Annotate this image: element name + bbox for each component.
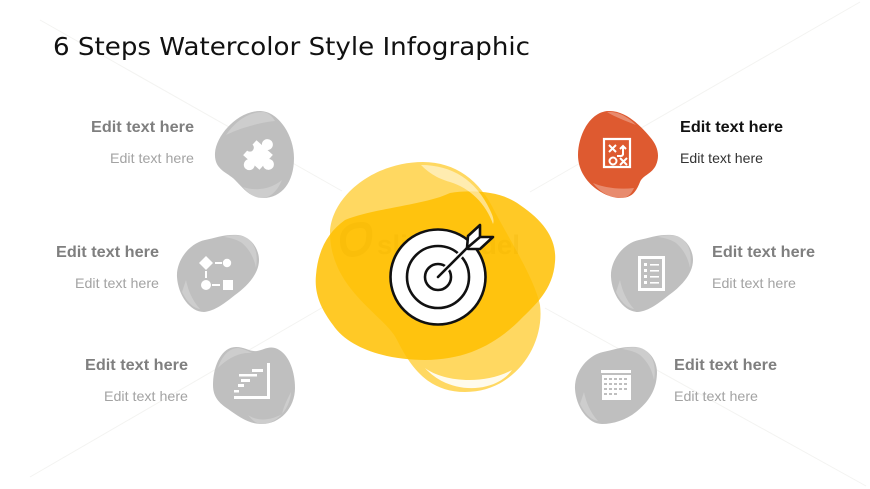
text: Edit text here xyxy=(75,275,159,291)
icon: puzzle piece xyxy=(234,130,286,182)
highlight xyxy=(182,235,257,309)
watermark: slideModel xyxy=(377,230,520,260)
text: Edit text here xyxy=(680,119,783,136)
icon: calendar xyxy=(601,370,631,400)
watermark xyxy=(340,222,520,260)
step 6: calendar xyxy=(575,347,777,424)
highlight xyxy=(580,347,655,421)
step 1: puzzle xyxy=(91,111,294,198)
text: Edit text here xyxy=(712,275,796,291)
highlight: top gloss xyxy=(421,165,494,224)
text: Edit text here xyxy=(712,244,815,261)
blob xyxy=(215,111,294,198)
icon: gantt chart xyxy=(234,363,270,399)
step 3: stair chart xyxy=(85,347,295,424)
text: Edit text here xyxy=(56,244,159,261)
text: Edit text here xyxy=(91,119,194,136)
blob xyxy=(578,111,658,198)
highlight xyxy=(218,348,291,424)
blob xyxy=(213,347,295,424)
icon: target with arrow xyxy=(390,225,493,324)
step 5: checklist xyxy=(611,235,815,312)
step 2: flowchart xyxy=(56,235,259,312)
central watercolor blob with target xyxy=(316,162,555,392)
highlight xyxy=(616,235,691,309)
highlight xyxy=(593,112,636,198)
title: 6 Steps Watercolor Style Infographic xyxy=(53,32,530,61)
blob: right yellow wash xyxy=(316,191,555,360)
highlight xyxy=(226,112,282,198)
icon: strategy board xyxy=(604,139,630,167)
text xyxy=(680,119,783,166)
text xyxy=(56,244,159,291)
highlight: bottom gloss xyxy=(425,368,512,388)
text xyxy=(712,244,815,291)
text: Edit text here xyxy=(110,150,194,166)
text: Edit text here xyxy=(674,357,777,374)
text: Edit text here xyxy=(680,150,763,166)
text: Edit text here xyxy=(85,357,188,374)
text xyxy=(85,357,188,404)
blob: upper and lower yellow wash xyxy=(330,162,541,392)
text: Edit text here xyxy=(674,388,758,404)
icon: flowchart xyxy=(199,256,233,290)
icon: checklist xyxy=(638,256,665,291)
text xyxy=(91,119,194,166)
step 4: strategy (highlighted) xyxy=(578,111,783,198)
text: Edit text here xyxy=(104,388,188,404)
blob xyxy=(177,235,259,312)
blob xyxy=(575,347,657,424)
blob xyxy=(611,235,693,312)
text xyxy=(674,357,777,404)
